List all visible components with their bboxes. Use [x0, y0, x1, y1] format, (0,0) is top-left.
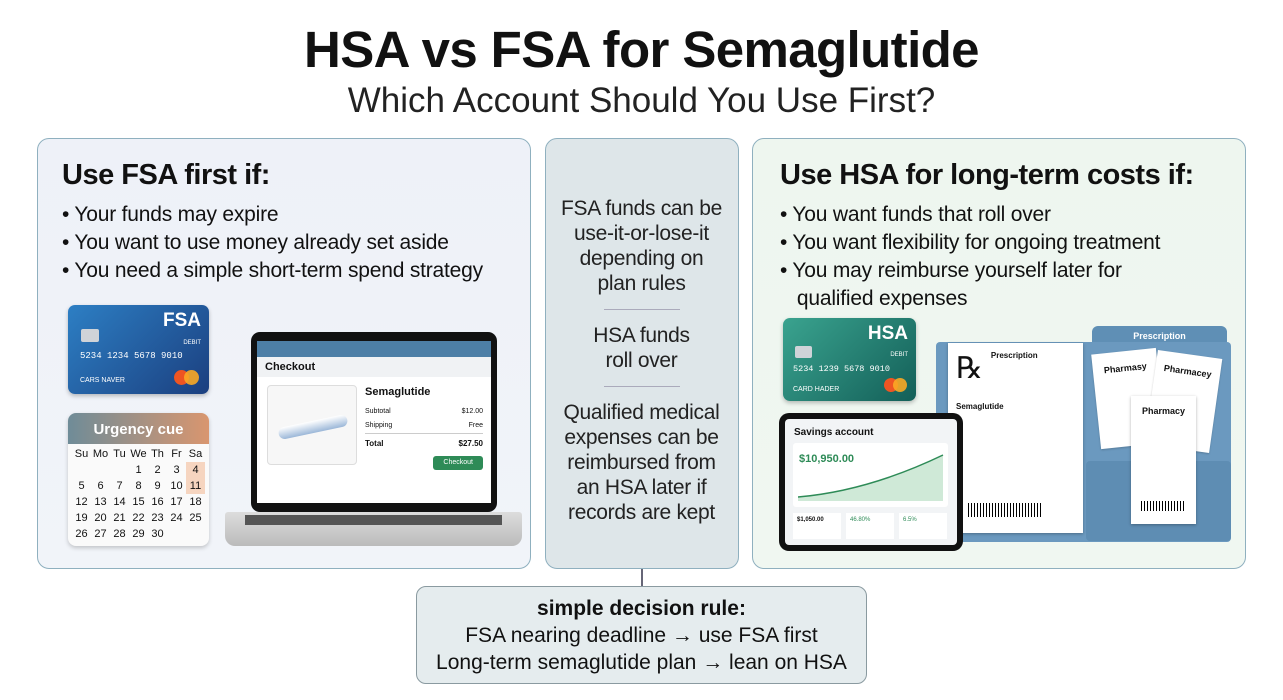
panel: FSA [37, 138, 531, 569]
icon: HSA card: DEBIT [890, 352, 908, 358]
icon: calendar: Th [151, 448, 164, 460]
icon: laptop checkout: Checkout [265, 361, 315, 373]
icon: calendar: 11 [190, 480, 201, 492]
icon: calendar: 16 [151, 496, 164, 508]
icon: calendar: 5 [78, 480, 85, 492]
icon: tablet savings: 6.5% [903, 517, 917, 523]
icon: calendar: We [130, 448, 147, 460]
bullets: HSA [780, 203, 1160, 310]
icon: calendar: 13 [94, 496, 107, 508]
text: facts: expenses can be [564, 426, 719, 449]
icon: HSA card: 5234 1239 5678 9010 [793, 364, 890, 374]
icon: calendar: 8 [135, 480, 142, 492]
icon: laptop checkout [225, 332, 522, 546]
icon: folder with prescription: Prescription [1133, 331, 1186, 341]
icon: calendar: 1 [135, 464, 142, 476]
icon: laptop checkout: Semaglutide [365, 386, 430, 398]
icon: calendar: 7 [116, 480, 123, 492]
icon: HSA card [783, 318, 916, 401]
heading: FSA: Use FSA first if: [62, 159, 270, 191]
icon: tablet savings: $10,950.00 [799, 453, 854, 465]
callout: decision rule: simple decision rule: [537, 597, 746, 620]
bullets: HSA: qualified expenses [797, 287, 967, 310]
text: facts: reimbursed from [567, 451, 716, 474]
icon: calendar: 23 [151, 512, 164, 524]
icon: calendar: 6 [97, 480, 104, 492]
panel: HSA [752, 138, 1246, 569]
bullets: HSA: • You want flexibility for ongoing treatment [780, 231, 1160, 254]
icon: folder with prescription [936, 326, 1231, 542]
icon: FSA card: CARS NAVER [80, 377, 125, 384]
icon: laptop checkout: Free [469, 422, 483, 429]
bullets: FSA: • You need a simple short-term spend strategy [62, 259, 483, 282]
icon: calendar: 14 [113, 496, 126, 508]
icon: folder with prescription: Pharmacey [1163, 363, 1212, 380]
callout: decision rule [416, 586, 867, 684]
title: HSA vs FSA for Semaglutide [304, 21, 979, 78]
icon: calendar: 26 [75, 528, 88, 540]
icon: FSA card [68, 305, 209, 394]
text: facts: depending on [580, 247, 703, 270]
icon: calendar: 15 [132, 496, 145, 508]
icon: calendar: 27 [94, 528, 107, 540]
icon: folder with prescription: ℞ [956, 352, 983, 385]
icon: calendar: 20 [94, 512, 107, 524]
bullets: FSA: • You want to use money already set aside [62, 231, 449, 254]
icon: calendar: Urgency cue [93, 421, 184, 438]
bullets: FSA [62, 203, 483, 282]
panel: middle facts [545, 138, 739, 569]
heading: HSA: Use HSA for long-term costs if: [780, 159, 1194, 191]
icon: HSA card: CARD HADER [793, 386, 839, 393]
icon: laptop checkout: Total [365, 439, 384, 448]
icon: calendar: 3 [173, 464, 180, 476]
icon: calendar: 21 [113, 512, 126, 524]
icon: calendar: 29 [132, 528, 145, 540]
icon: folder with prescription: Pharmasy [1103, 361, 1147, 375]
icon: FSA card: 5234 1234 5678 9010 [80, 351, 183, 361]
icon: laptop checkout: Subtotal [365, 408, 391, 415]
icon: calendar: Mo [93, 448, 108, 460]
callout: decision rule: Long-term semaglutide plan → lean on HSA [436, 651, 847, 674]
text: facts: use-it-or-lose-it [574, 222, 709, 245]
text: facts: plan rules HSA funds [593, 272, 690, 347]
icon: HSA card: HSA [868, 323, 908, 344]
icon: calendar: Su [75, 448, 88, 460]
icon: tablet savings: $1,050.00 [797, 517, 824, 523]
icon: calendar: 2 [154, 464, 161, 476]
bullets: FSA: • Your funds may expire [62, 203, 278, 226]
icon: calendar: Sa [189, 448, 202, 460]
icon: calendar: 17 [170, 496, 183, 508]
icon: laptop checkout: $27.50 [459, 439, 483, 448]
icon: calendar: 22 [132, 512, 145, 524]
icon: FSA card: FSA [163, 310, 201, 331]
icon: calendar: 19 [75, 512, 88, 524]
text: facts [561, 197, 722, 524]
icon: calendar: Tu [113, 448, 126, 460]
icon: folder with prescription: Semaglutide [956, 402, 1004, 411]
bullets: HSA: • You may reimburse yourself later for [780, 259, 1122, 282]
icon: folder with prescription: Prescription [991, 351, 1038, 360]
icon: calendar: 28 [113, 528, 126, 540]
callout: decision rule: FSA nearing deadline → use FSA first [465, 624, 818, 647]
icon: calendar: 24 [170, 512, 183, 524]
icon: calendar [68, 413, 209, 546]
connector line [641, 569, 642, 587]
icon: laptop checkout: Shipping [365, 422, 392, 429]
icon: folder with prescription: Pharmacy [1142, 406, 1185, 416]
icon: calendar: Fr [171, 448, 182, 460]
icon: calendar: 9 [154, 480, 161, 492]
text: facts: an HSA later if [577, 476, 706, 499]
icon: laptop checkout: $12.00 [462, 408, 483, 415]
icon: calendar: 18 [189, 496, 202, 508]
icon: tablet savings: 46.80% [850, 517, 870, 523]
icon: FSA card: DEBIT [183, 340, 201, 346]
icon: calendar: 25 [189, 512, 202, 524]
text: facts: FSA funds can be [561, 197, 722, 220]
icon: tablet savings: Savings account [794, 427, 873, 438]
icon: calendar: 10 [170, 480, 183, 492]
icon: laptop checkout: Checkout [443, 459, 473, 466]
icon: calendar: 12 [75, 496, 88, 508]
icon: calendar: 4 [192, 464, 199, 476]
text: facts: records are kept [568, 501, 715, 524]
subtitle: Which Account Should You Use First? [348, 81, 935, 120]
text: facts: roll over Qualified medical [564, 349, 719, 424]
icon: tablet savings [779, 413, 963, 551]
icon: calendar: 30 [151, 528, 164, 540]
bullets: HSA: • You want funds that roll over [780, 203, 1051, 226]
